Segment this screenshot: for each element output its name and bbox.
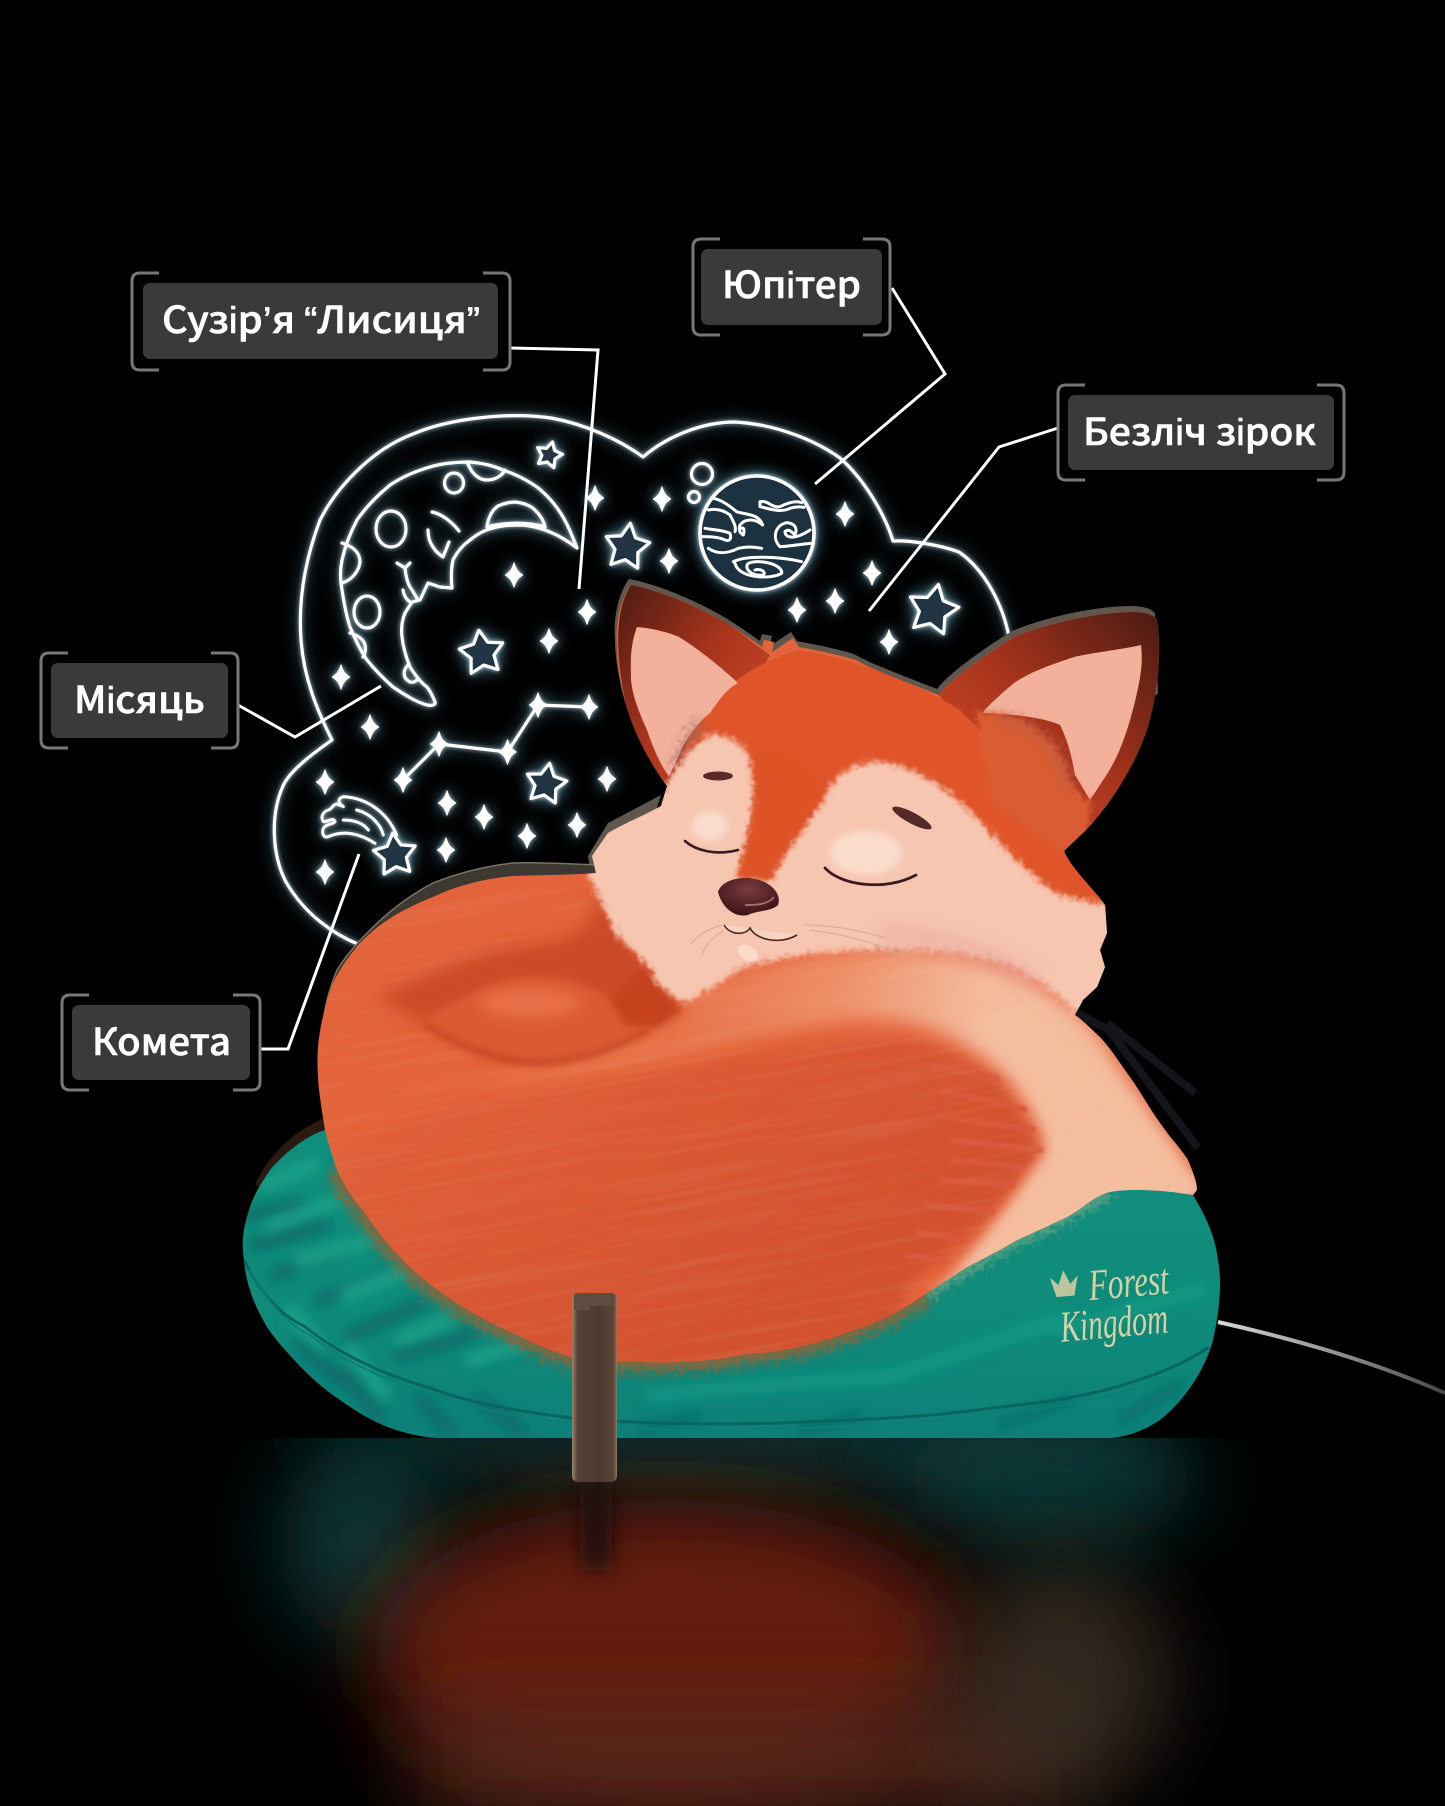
table reflection	[280, 1390, 1200, 1806]
label: jupiter	[693, 239, 890, 335]
mouth	[724, 925, 797, 940]
pillow streaks	[250, 1165, 1200, 1432]
whiskers	[690, 925, 900, 955]
right ear	[939, 612, 1159, 830]
pale fur transition	[927, 1192, 1110, 1293]
stand top	[574, 1293, 614, 1310]
pillow seam	[244, 1260, 1209, 1424]
right inner ear	[983, 645, 1142, 800]
chest red shadow	[610, 965, 682, 1027]
tail tip peach fur	[928, 1096, 1197, 1292]
cloud outline	[274, 416, 1009, 945]
tail highlight band	[523, 947, 1197, 1264]
label: jupiter: Юпітер	[722, 255, 861, 309]
label: many stars	[1058, 385, 1344, 480]
fox body	[317, 585, 1197, 1362]
label: constellation fox	[132, 273, 510, 370]
back edge of pillow	[255, 1118, 340, 1200]
tail fur texture	[352, 900, 1043, 1358]
label: moon: Місяць	[74, 670, 205, 724]
right ear base fur	[975, 712, 1092, 855]
teal pillow	[242, 1130, 1220, 1438]
tail red core	[300, 1038, 1043, 1370]
label: comet	[62, 995, 260, 1090]
nose bridge	[736, 745, 825, 880]
right eyebrow	[890, 803, 934, 833]
wood edge of the lamp	[325, 579, 1158, 1010]
label: many stars: Безліч зірок	[1083, 402, 1316, 456]
pointer: comet	[261, 854, 359, 1049]
wooden stand	[572, 1293, 617, 1482]
curl lower rim	[423, 1023, 650, 1063]
fox illustration	[317, 585, 1197, 1362]
power cable	[1218, 1322, 1445, 1393]
chin	[735, 941, 761, 965]
eyelid highlights	[692, 811, 728, 841]
left eyebrow	[703, 772, 733, 780]
pointer: many stars	[869, 428, 1058, 611]
stars	[372, 439, 963, 875]
right closed eye	[825, 868, 916, 885]
moon	[340, 462, 577, 705]
rear cable clip	[1077, 1013, 1198, 1148]
crown icon	[1049, 1269, 1079, 1298]
forehead mask	[680, 650, 1110, 920]
label: comet: Комета	[92, 1012, 231, 1066]
jupiter	[688, 464, 814, 590]
pointer: jupiter	[815, 288, 945, 484]
logo word Forest: Forest	[1086, 1254, 1172, 1310]
sparkles	[316, 486, 898, 884]
left closed eye	[685, 841, 738, 852]
pale face	[585, 733, 1115, 1015]
label: constellation fox: Сузір’я “Лисиця ”	[162, 290, 480, 344]
neck blush	[880, 935, 1040, 985]
glowing engraved space scene	[274, 416, 1009, 945]
brand logo: Forest Kingdom	[1049, 1254, 1175, 1352]
label: moon	[41, 653, 238, 748]
logo word Kingdom: Kingdom	[1057, 1294, 1170, 1352]
left inner ear	[631, 627, 738, 776]
comet	[322, 797, 397, 843]
pointer: moon	[238, 686, 381, 737]
curl shade	[375, 880, 682, 1027]
nose	[718, 878, 779, 916]
pointer lines	[238, 288, 1058, 1049]
constellation fox	[394, 693, 598, 792]
pointer: constellation	[510, 348, 598, 589]
curl almond	[444, 1002, 636, 1060]
left ear	[618, 585, 770, 800]
curl highlight	[480, 988, 580, 1018]
fur transition shadow	[337, 1170, 927, 1362]
tail fur tips	[905, 1065, 1043, 1262]
